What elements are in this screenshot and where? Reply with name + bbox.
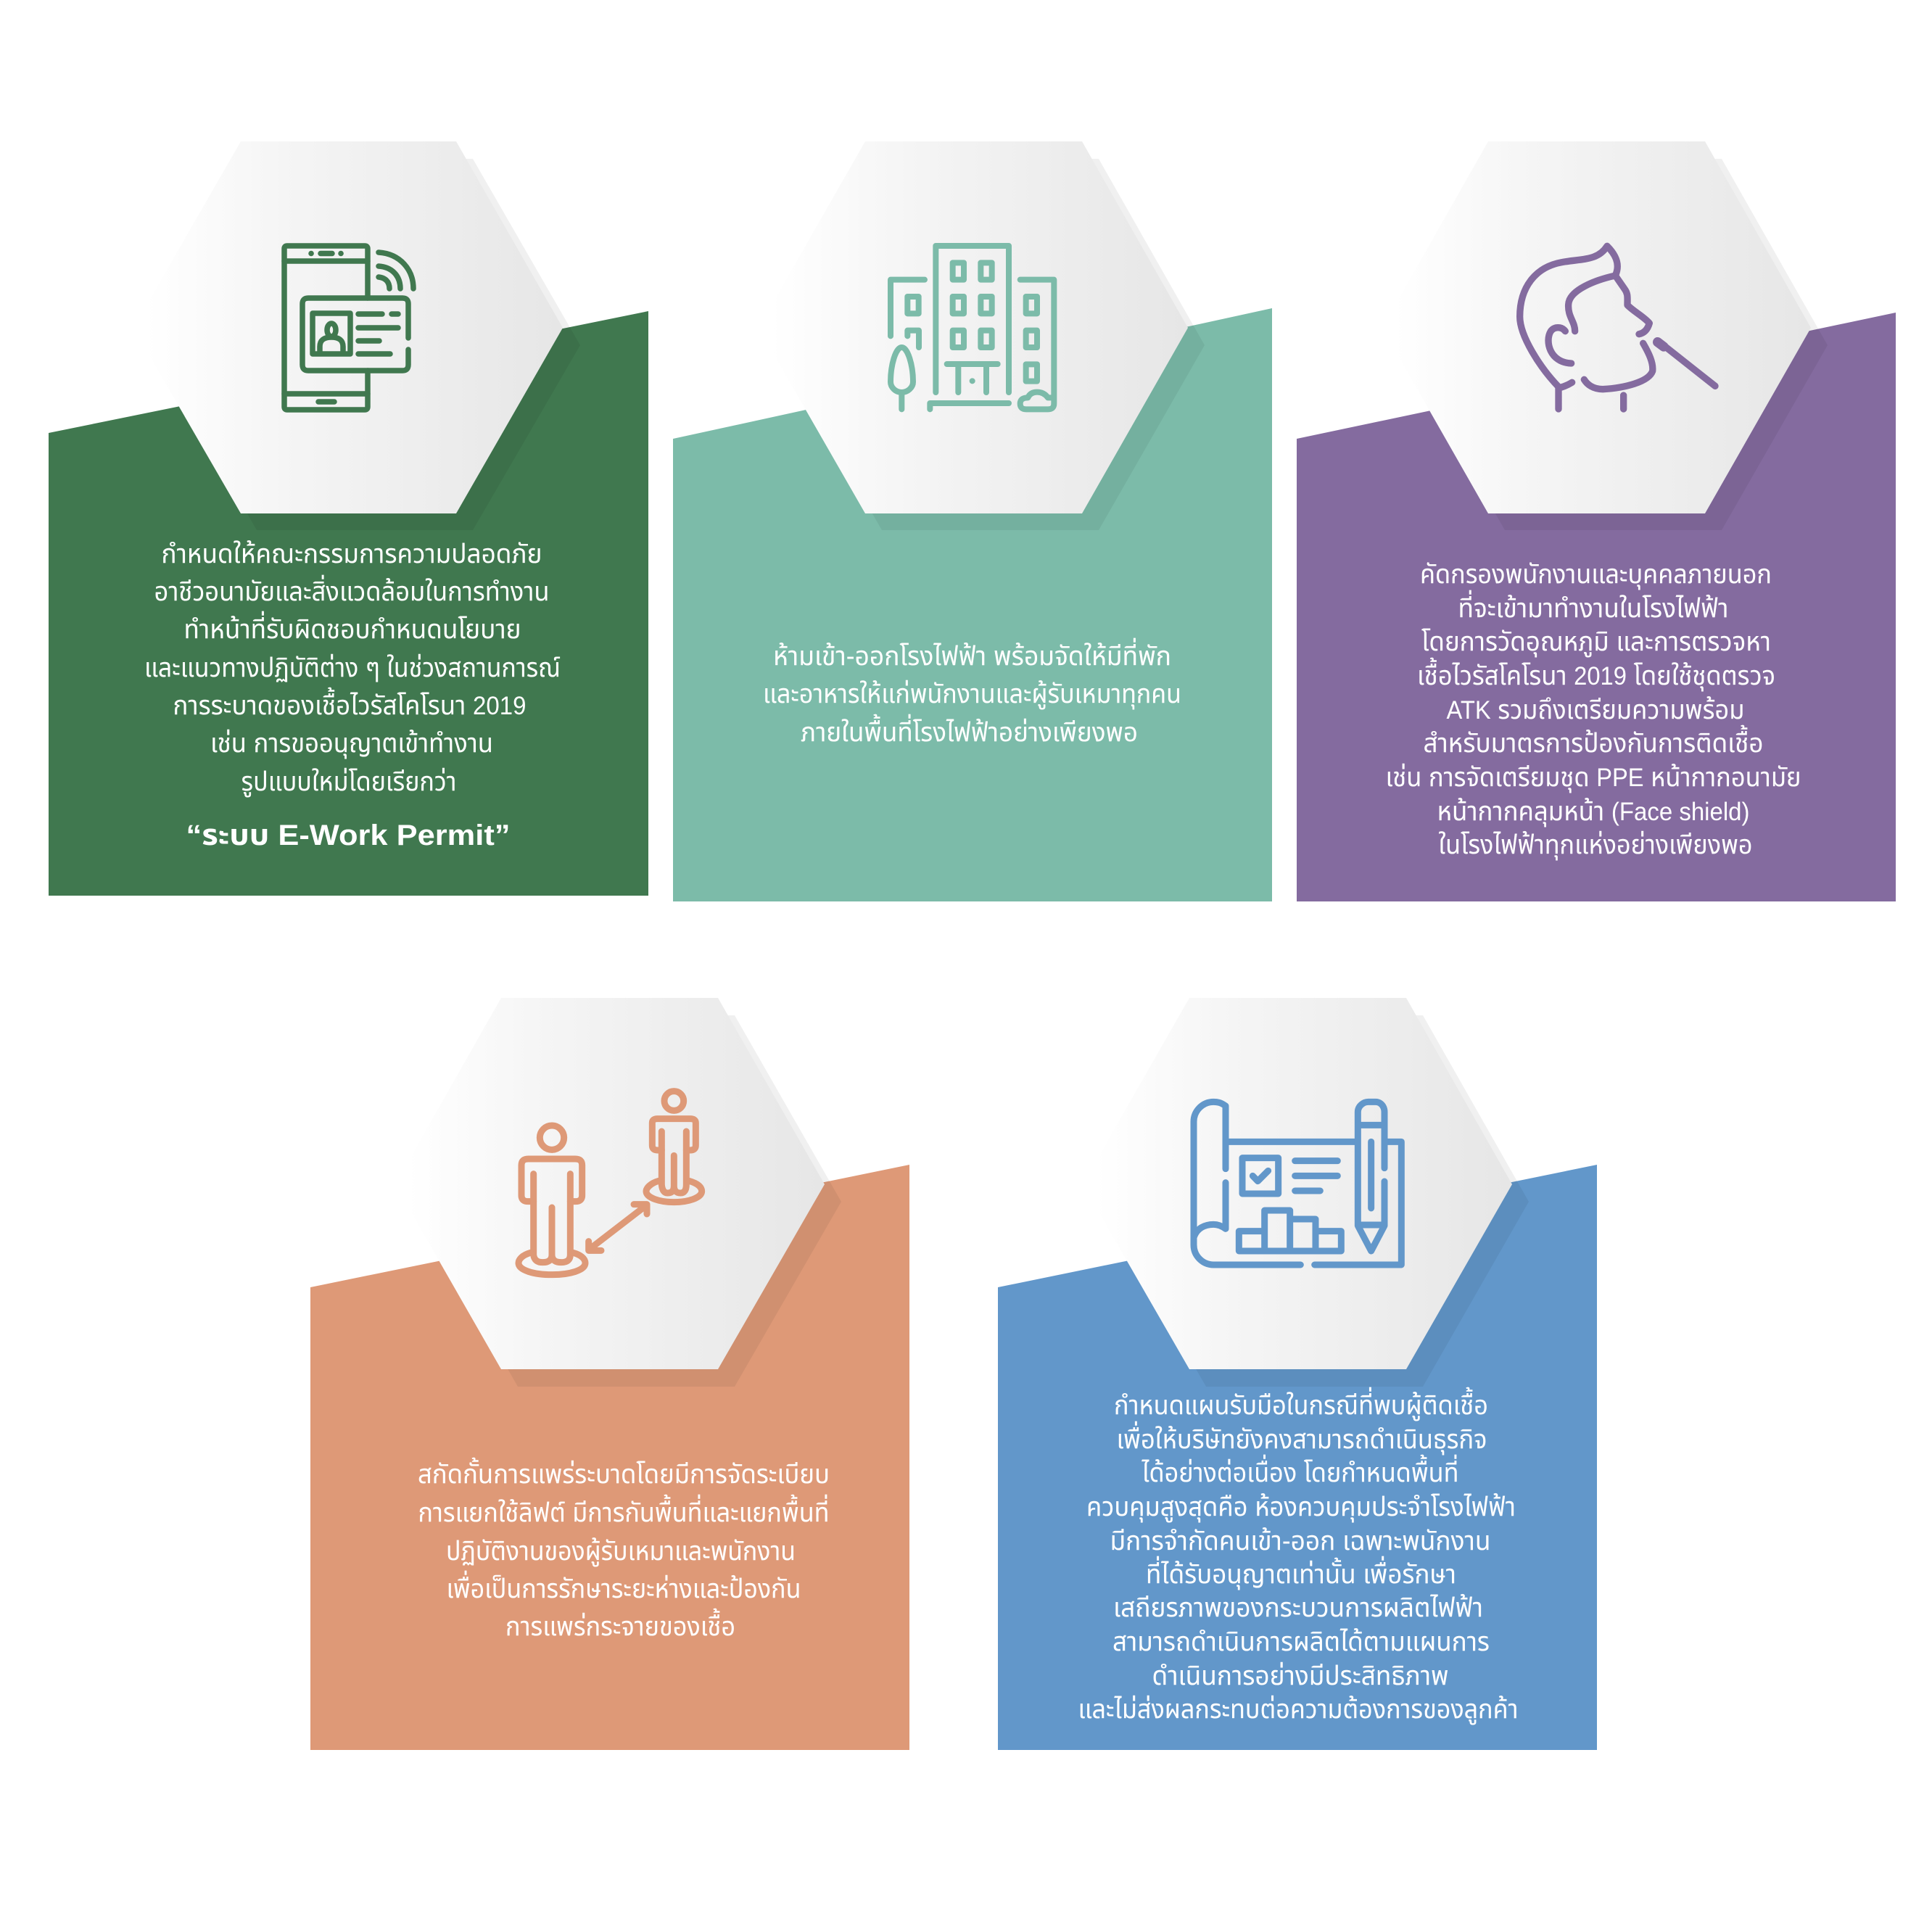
hexagon shadow xyxy=(150,159,580,530)
hexagon shadow xyxy=(1399,159,1828,530)
text block: อาชีวอนามัยและสิ่งแวดล้อมในการทำงาน xyxy=(154,574,550,606)
text block: “ระบบ E-Work Permit” xyxy=(186,820,511,851)
text block: สกัดกั้นการแพร่ระบาดโดยมีการจัดระเบียบ xyxy=(418,1457,830,1489)
text block: กำหนดแผนรับมือในกรณีที่พบผู้ติดเชื้อ xyxy=(1114,1387,1488,1421)
text block xyxy=(1385,559,1801,861)
icon: two people with distance arrow xyxy=(519,1091,702,1275)
panel: screening xyxy=(1297,141,1896,901)
hexagon xyxy=(1083,998,1512,1369)
text block: ดำเนินการอย่างมีประสิทธิภาพ xyxy=(1152,1661,1449,1690)
purple card background xyxy=(1297,313,1896,901)
text block: การแพร่กระจายของเชื้อ xyxy=(505,1608,735,1641)
icon: blueprint and pencil xyxy=(1194,1102,1401,1265)
text block: สำหรับมาตรการป้องกันการติดเชื้อ xyxy=(1423,724,1764,758)
hexagon shadow xyxy=(1099,1015,1529,1387)
text block: ควบคุมสูงสุดคือ ห้องควบคุมประจำโรงไฟฟ้า xyxy=(1086,1492,1516,1523)
text block: รูปแบบใหม่โดยเรียกว่า xyxy=(241,767,457,798)
text block: มีการจำกัดคนเข้า-ออก เฉพาะพนักงาน xyxy=(1110,1526,1491,1556)
text block: ปฏิบัติงานของผู้รับเหมาและพนักงาน xyxy=(446,1536,796,1567)
text block: ATK รวมถึงเตรียมความพร้อม xyxy=(1446,695,1745,724)
hexagon xyxy=(759,141,1188,513)
panel: response plan xyxy=(998,998,1597,1750)
text block: การระบาดของเชื้อไวรัสโคโรนา 2019 xyxy=(173,687,527,720)
icon: face with swab xyxy=(1520,246,1715,409)
text block: กำหนดให้คณะกรรมการความปลอดภัย xyxy=(161,539,542,569)
text block xyxy=(763,637,1181,747)
hexagon xyxy=(1382,141,1811,513)
panel: no entry xyxy=(673,141,1272,901)
text block xyxy=(418,1457,830,1641)
text block: โดยการวัดอุณหภูมิ และการตรวจหา xyxy=(1421,627,1771,658)
text block: หน้ากากคลุมหน้า (Face shield) xyxy=(1437,796,1749,827)
text block: เช่น การขออนุญาตเข้าทำงาน xyxy=(210,728,493,759)
text block: เชื้อไวรัสโคโรนา 2019 โดยใช้ชุดตรวจ xyxy=(1417,657,1775,692)
icon: phone with id card xyxy=(284,246,413,410)
hexagon shadow xyxy=(775,159,1205,530)
text block: เสถียรภาพของกระบวนการผลิตไฟฟ้า xyxy=(1113,1593,1483,1622)
text block: และไม่ส่งผลกระทบต่อความต้องการของลูกค้า xyxy=(1078,1694,1519,1725)
panel: e-work permit xyxy=(49,141,648,896)
green card background xyxy=(49,311,648,896)
text block: ภายในพื้นที่โรงไฟฟ้าอย่างเพียงพอ xyxy=(801,714,1138,747)
text block: ทำหน้าที่รับผิดชอบกำหนดนโยบาย xyxy=(184,611,521,644)
text block: ในโรงไฟฟ้าทุกแห่งอย่างเพียงพอ xyxy=(1439,830,1752,861)
text block: ห้ามเข้า-ออกโรงไฟฟ้า พร้อมจัดให้มีที่พัก xyxy=(773,637,1171,671)
text block: ได้อย่างต่อเนื่อง โดยกำหนดพื้นที่ xyxy=(1142,1454,1459,1487)
panel: social distancing xyxy=(310,998,909,1750)
text block xyxy=(1078,1387,1519,1725)
text block: การแยกใช้ลิฟต์ มีการกันพื้นที่และแยกพื้นที่ xyxy=(418,1494,830,1527)
text block: เพื่อเป็นการรักษาระยะห่างและป้องกัน xyxy=(447,1570,801,1603)
icon: buildings xyxy=(891,246,1054,409)
hexagon xyxy=(395,998,825,1369)
text block: และอาหารให้แก่พนักงานและผู้รับเหมาทุกคน xyxy=(763,679,1181,710)
text block: เพื่อให้บริษัทยังคงสามารถดำเนินธุรกิจ xyxy=(1117,1421,1487,1456)
text block: สามารถดำเนินการผลิตได้ตามแผนการ xyxy=(1112,1627,1490,1656)
text block: ที่จะเข้ามาทำงานในโรงไฟฟ้า xyxy=(1458,590,1729,623)
text block: ที่ได้รับอนุญาตเท่านั้น เพื่อรักษา xyxy=(1146,1556,1456,1590)
text block: คัดกรองพนักงานและบุคคลภายนอก xyxy=(1420,559,1772,590)
text block: เช่น การจัดเตรียมชุด PPE หน้ากากอนามัย xyxy=(1385,762,1801,793)
orange card background xyxy=(310,1165,909,1750)
teal card background xyxy=(673,308,1272,901)
blue card background xyxy=(998,1165,1597,1750)
text block xyxy=(144,539,561,851)
hexagon shadow xyxy=(412,1015,841,1387)
hexagon xyxy=(133,141,563,513)
text block: และแนวทางปฏิบัติต่าง ๆ ในช่วงสถานการณ์ xyxy=(144,653,561,682)
